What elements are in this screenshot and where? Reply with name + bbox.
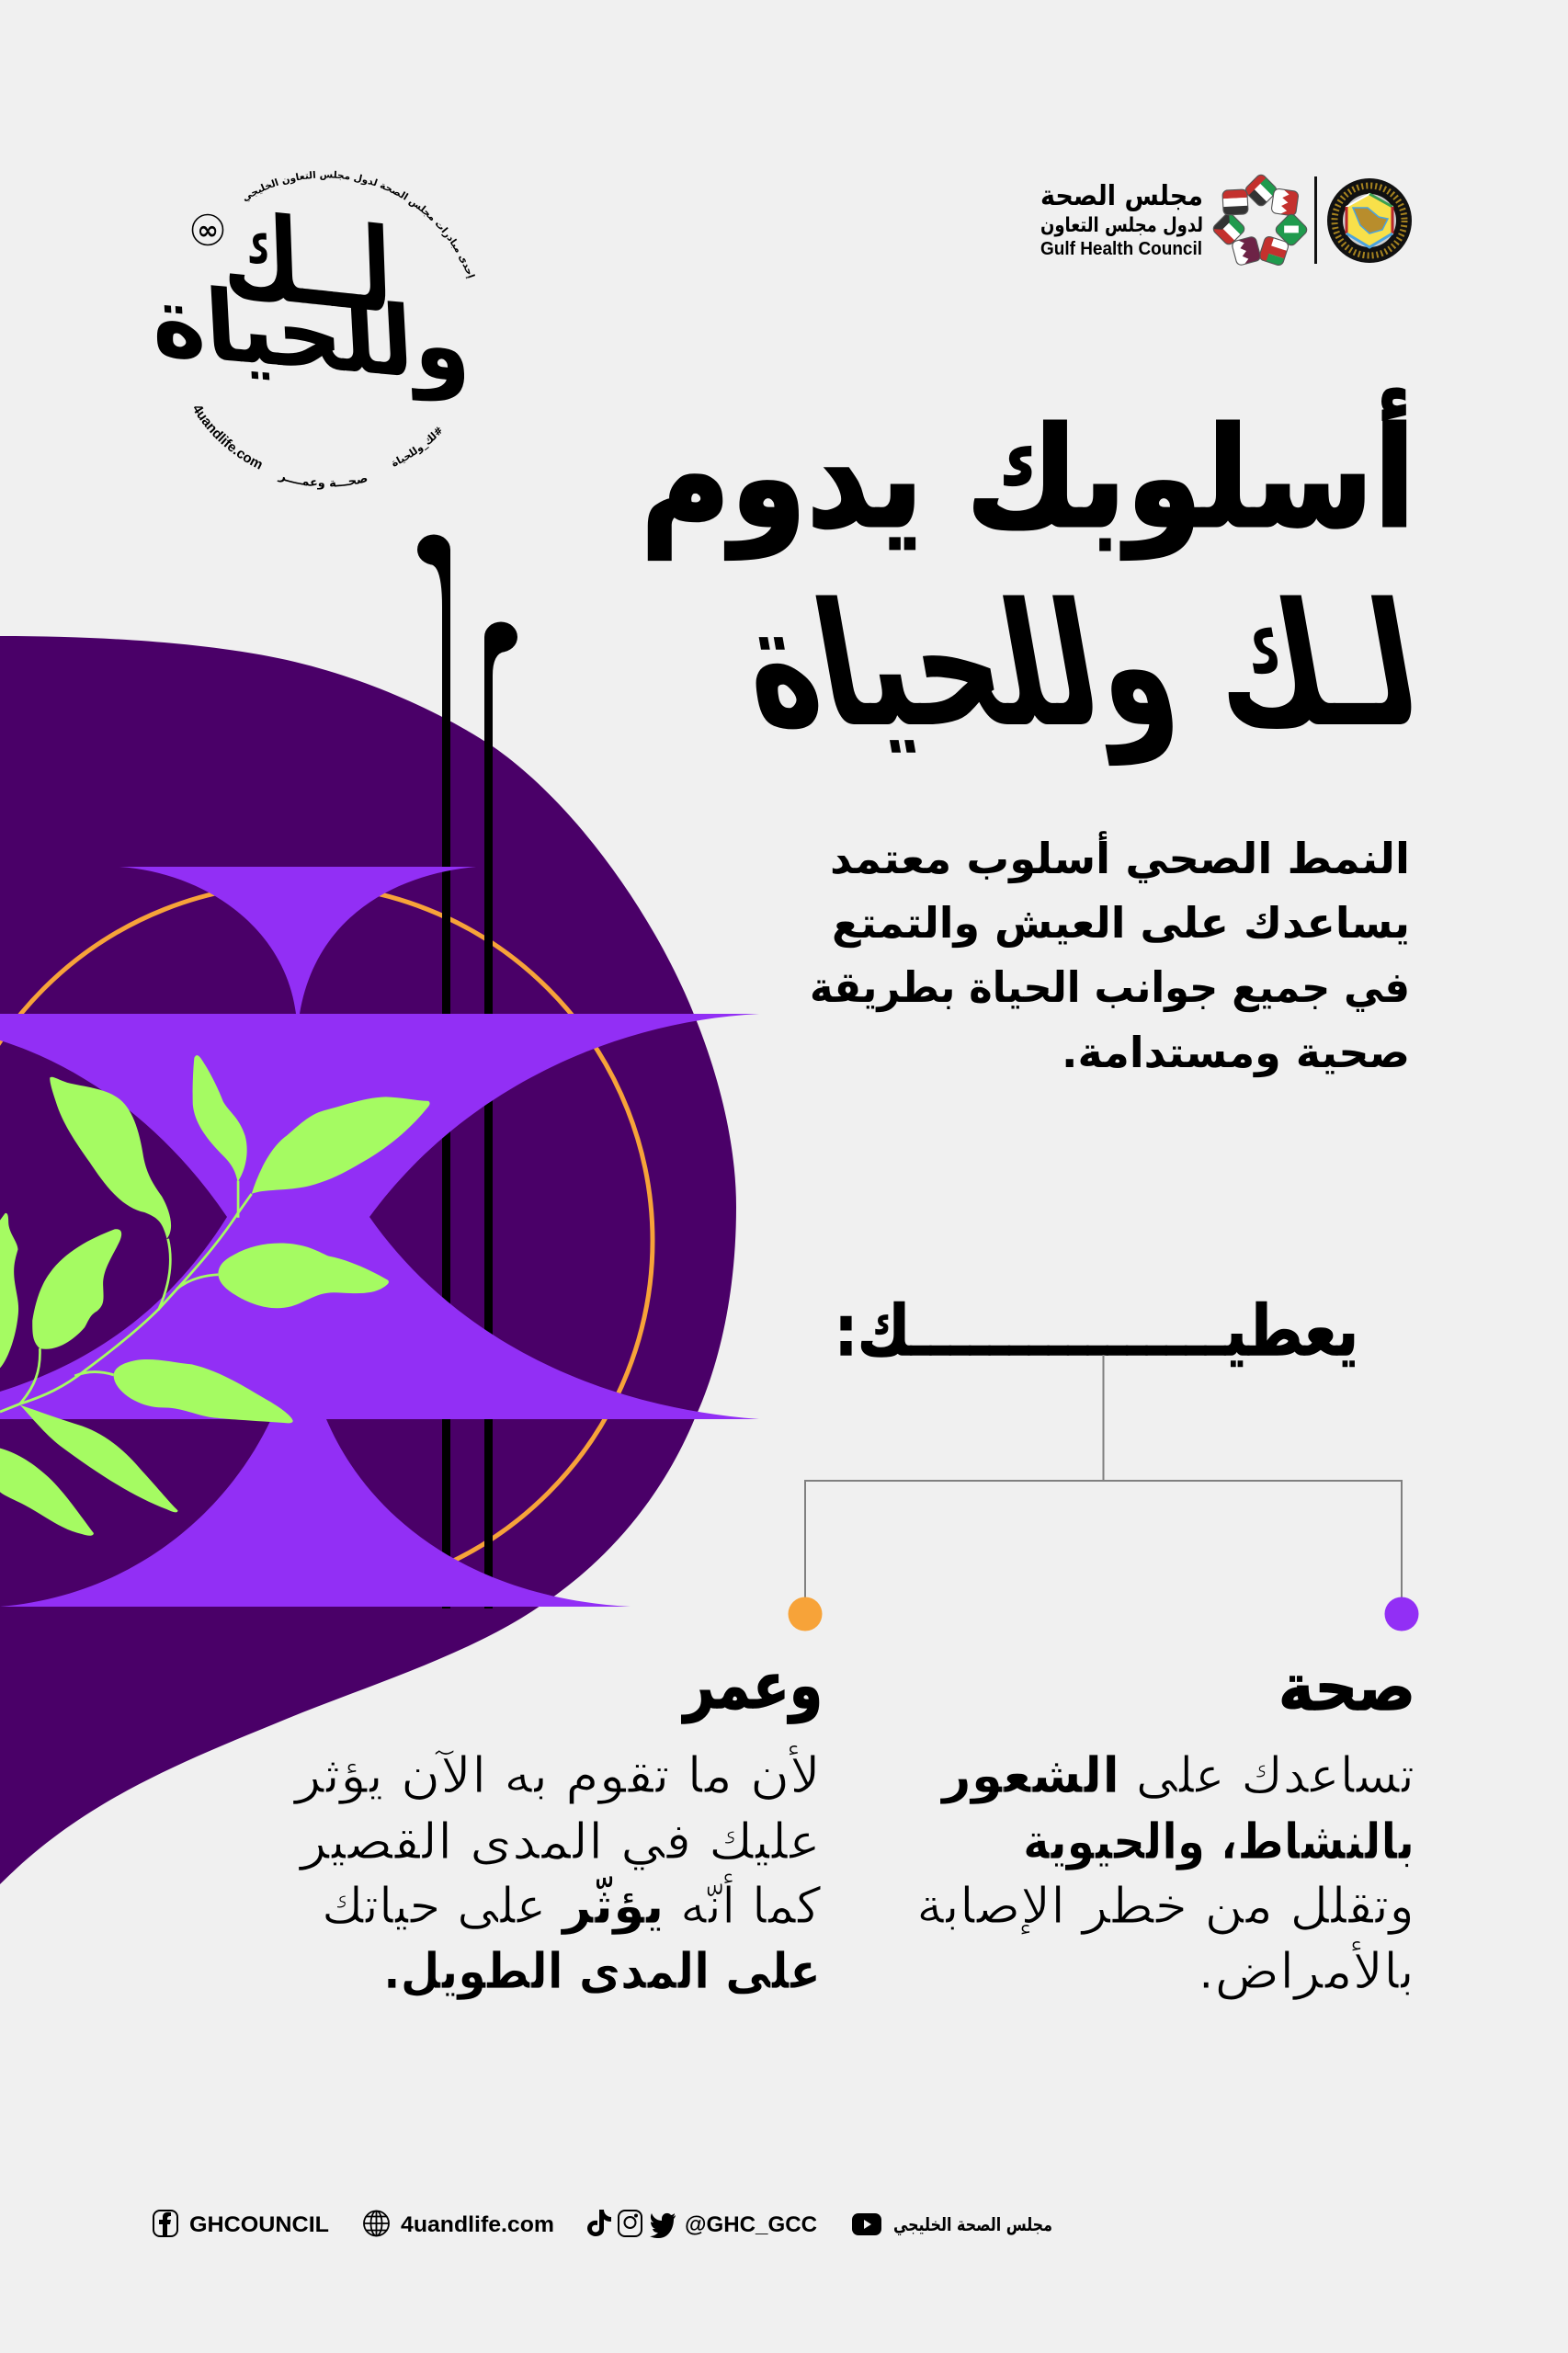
council name: لدول مجلس التعاون	[1040, 214, 1203, 237]
column: health	[916, 1650, 1415, 2000]
council logo	[1040, 173, 1412, 267]
circular caption: website: 4uandlife.com	[193, 406, 262, 470]
icon: facebook	[153, 2211, 177, 2236]
health body text: بالأمراض.	[1198, 1940, 1415, 2000]
icon: globe	[364, 2211, 389, 2235]
logo wordmark: lak: لــك	[221, 187, 394, 340]
intro paragraph: يساعدك على العيش والتمتع	[832, 898, 1410, 948]
subheading: gives you: يعطيــــــــــــــــك:	[835, 1290, 1358, 1371]
life body text: كما أنّه يؤثّر على حياتك	[322, 1873, 821, 1935]
intro paragraph: النمط الصحي أسلوب معتمد	[830, 831, 1410, 883]
dot: purple	[1384, 1597, 1419, 1631]
label: twitter handle: @GHC_GCC	[685, 2212, 817, 2237]
label: channel name: مجلس الصحة الخليجي	[893, 2213, 1052, 2236]
intro paragraph: صحية ومستدامة.	[1062, 1028, 1410, 1077]
health body text: بالنشاط، والحيوية	[1023, 1813, 1415, 1870]
connector lines	[805, 1355, 1402, 1614]
heading: health: صحة	[1278, 1650, 1415, 1725]
council name	[1040, 180, 1203, 259]
icon: flag star	[1211, 173, 1309, 267]
icon: infinity badge: ∞	[197, 215, 219, 245]
campaign logo	[149, 171, 475, 489]
icon: GCC seal	[1327, 178, 1412, 263]
icon: twitter	[650, 2213, 676, 2238]
footer social bar	[153, 2210, 1052, 2238]
intro paragraph: في جميع جوانب الحياة بطريقة	[810, 962, 1410, 1012]
life body text: عليك في المدى القصير	[298, 1813, 821, 1870]
green leafy branch	[0, 1055, 430, 1536]
circular caption: hashtag: لك_وللحياة#	[392, 426, 441, 467]
bright purple hourglass shapes	[0, 867, 759, 1607]
dark purple blob	[0, 636, 736, 1884]
heading: life: وعمر	[682, 1648, 823, 1723]
divider	[1314, 176, 1317, 264]
icon: youtube	[852, 2213, 881, 2235]
black stems with round heads	[417, 535, 517, 1608]
dot: orange	[789, 1597, 822, 1631]
illustration: purple blob with hourglass and leaves	[0, 535, 759, 1884]
main title	[641, 389, 1433, 767]
council name: Gulf Health Council	[1040, 239, 1202, 259]
icon: instagram	[619, 2211, 642, 2236]
life body text: على المدى الطويل.	[383, 1942, 821, 2000]
circular caption: initiative line: إحدى مبادرات مجلس الصحة لدول مجلس التعاون الخليجي	[244, 171, 475, 279]
orange ring	[0, 884, 653, 1597]
column: life	[292, 1648, 823, 2000]
icon: tiktok	[587, 2210, 611, 2236]
circular caption: health and life: صحـــة وعمــــر	[278, 476, 368, 489]
life body text	[292, 1745, 821, 2000]
health body text	[916, 1746, 1415, 2000]
life body text: لأن ما تقوم به الآن يؤثر	[292, 1745, 821, 1804]
label: website: 4uandlife.com	[401, 2212, 554, 2237]
intro paragraph	[810, 831, 1410, 1077]
health body text: وتقلل من خطر الإصابة	[916, 1877, 1415, 1935]
label: GHCOUNCIL: GHCOUNCIL	[189, 2212, 329, 2237]
logo wordmark: walilhayah: وللحياة	[149, 264, 472, 405]
council name: مجلس الصحة	[1040, 180, 1203, 212]
icon: infinity badge	[193, 215, 222, 245]
title line 1: أسلوبك يدوم	[641, 389, 1415, 560]
health body text: تساعدك على الشعور	[939, 1746, 1415, 1804]
